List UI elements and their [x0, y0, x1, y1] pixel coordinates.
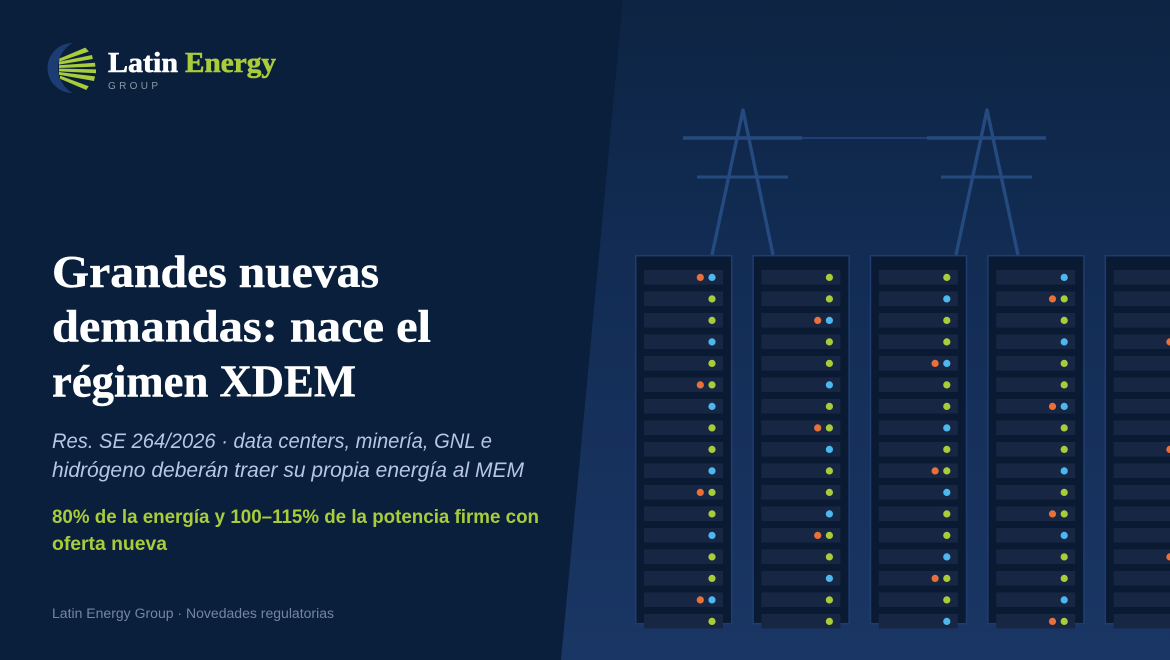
- subtitle: Res. SE 264/2026 · data centers, minería, GNL e: [52, 429, 492, 453]
- logo subline: GROUP: [108, 81, 158, 92]
- logo: Latin Energy Group: [47, 43, 276, 93]
- title: [52, 247, 431, 406]
- transmission wire: [802, 137, 927, 139]
- key requirement callout: [52, 507, 539, 555]
- key requirement callout: 80% de la energía y 100–115% de la potencia firme con: [52, 507, 539, 528]
- icon: green sun rays: [59, 48, 96, 90]
- panel: right slanted illustration background: [561, 0, 1170, 660]
- footer: Latin Energy Group · Novedades regulatorias: [52, 606, 334, 621]
- server rack 3: [870, 256, 966, 628]
- subtitle: hidrógeno deberán traer su propia energía al MEM: [52, 458, 524, 482]
- icon: crescent: [47, 43, 72, 93]
- server rack 1: [636, 256, 732, 628]
- server rack 2: [753, 256, 849, 628]
- icon: transmission tower left: [683, 110, 802, 255]
- server rack 5 (cropped by page edge): [1105, 256, 1170, 628]
- title: Grandes nuevas: [52, 247, 379, 297]
- server rack 4: [988, 256, 1084, 628]
- logo wordmark accent: Energy: [185, 48, 276, 79]
- subtitle: [52, 429, 524, 482]
- key requirement callout: oferta nueva: [52, 534, 167, 555]
- logo wordmark: Latin: [108, 48, 178, 79]
- icon: transmission tower right: [927, 110, 1046, 255]
- title: demandas: nace el: [52, 302, 431, 352]
- title: régimen XDEM: [52, 356, 356, 406]
